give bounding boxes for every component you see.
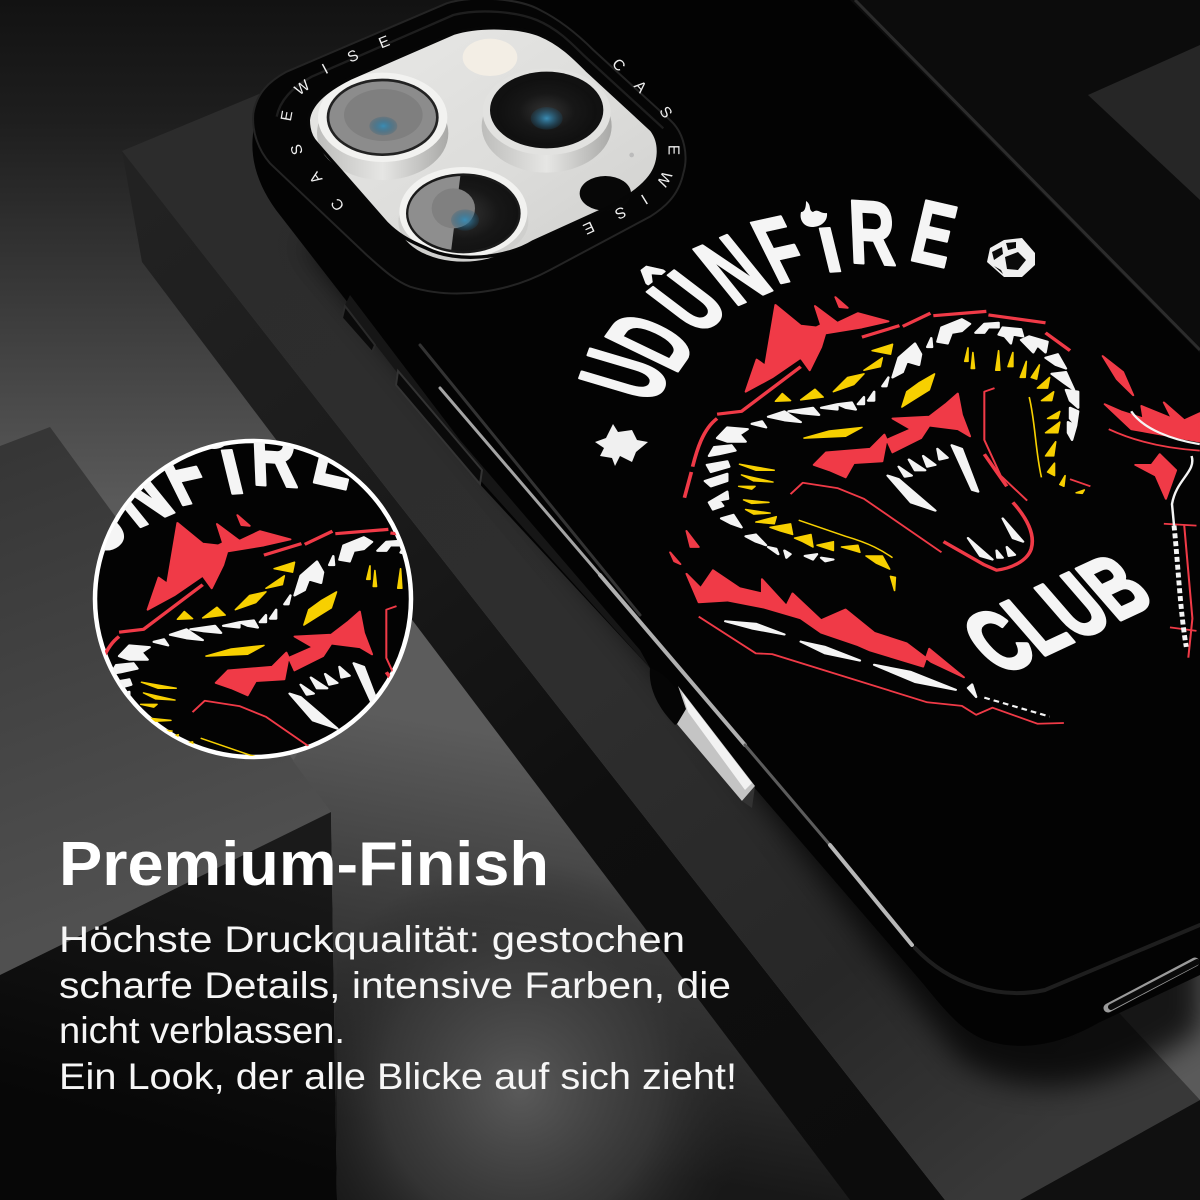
artwork title: E bbox=[903, 181, 965, 286]
bezel branding: E bbox=[376, 33, 392, 52]
lower side case tint bbox=[345, 295, 650, 668]
camera module bbox=[253, 0, 685, 293]
icon: dice bbox=[987, 238, 1035, 277]
camera plate bbox=[308, 28, 658, 257]
artwork title: U bbox=[555, 338, 694, 412]
artwork title: N bbox=[677, 217, 791, 324]
description: Höchste Druckqualität: gestochen bbox=[59, 919, 685, 960]
lens bottom bbox=[398, 167, 528, 262]
bezel branding: S bbox=[288, 142, 307, 157]
artwork title: D bbox=[582, 297, 721, 386]
silver side button bbox=[650, 668, 755, 808]
flash bbox=[463, 39, 517, 76]
bezel branding: I bbox=[638, 190, 650, 207]
bezel branding: W bbox=[653, 168, 675, 190]
bezel branding: A bbox=[306, 168, 326, 187]
background: dark area behind phone on the right bbox=[840, 0, 1200, 370]
lens right bbox=[482, 68, 612, 173]
background: light spot bbox=[337, 800, 860, 1200]
zoom title fragment: R bbox=[249, 403, 299, 507]
artwork title: Û bbox=[628, 256, 749, 349]
bezel branding: A bbox=[630, 77, 650, 97]
phone case body bbox=[252, 0, 1200, 1046]
icon: flame on the i bbox=[801, 201, 827, 227]
zoom title fragment: N bbox=[79, 439, 193, 546]
artwork dragon bbox=[670, 297, 1200, 724]
description: nicht verblassen. bbox=[59, 1010, 345, 1051]
artwork title: I bbox=[812, 215, 848, 286]
bezel branding: C bbox=[608, 56, 628, 75]
phone bbox=[252, 0, 1200, 1046]
right edge highlight bbox=[855, 0, 1200, 350]
bezel ring over plate bbox=[308, 28, 658, 257]
bezel inner gloss bbox=[277, 11, 663, 128]
microphone dot bbox=[629, 153, 634, 157]
heading: Premium-Finish bbox=[59, 830, 549, 899]
sensor bbox=[580, 176, 631, 211]
bezel branding: E bbox=[580, 218, 597, 237]
bezel branding: E bbox=[278, 109, 296, 122]
bezel branding: E bbox=[664, 145, 681, 155]
zoom title fragment: E bbox=[305, 403, 367, 508]
bezel branding bbox=[278, 33, 681, 237]
bezel branding: C bbox=[328, 195, 348, 214]
background: lower left step front bbox=[0, 812, 337, 1200]
description bbox=[59, 919, 737, 1097]
side button volume bbox=[396, 371, 482, 484]
zoom title fragment: I bbox=[214, 437, 250, 508]
zoom title fragment: F bbox=[140, 421, 225, 525]
zoom title fragment bbox=[104, 442, 349, 550]
phone shadow bbox=[300, 240, 1200, 1086]
artwork title: F bbox=[738, 199, 823, 303]
print artwork bbox=[555, 181, 1200, 724]
artwork title: R bbox=[847, 181, 897, 285]
icon: star emblem bbox=[595, 424, 648, 466]
block: dark side band bbox=[122, 151, 945, 1200]
zoom flame bbox=[210, 444, 226, 449]
camera bezel bbox=[253, 0, 685, 293]
background: lower left step top bbox=[0, 427, 331, 975]
bezel branding: S bbox=[345, 47, 361, 66]
bezel branding: W bbox=[292, 77, 314, 99]
zoom title fragment: Û bbox=[30, 478, 151, 571]
background: upper right block top bbox=[1088, 45, 1200, 200]
description: scharfe Details, intensive Farben, die bbox=[59, 965, 731, 1006]
bezel branding: S bbox=[655, 103, 675, 121]
description: Ein Look, der alle Blicke auf sich zieht! bbox=[59, 1056, 737, 1097]
background: centre gray face bbox=[293, 560, 900, 1200]
zoom circle bbox=[92, 438, 414, 760]
zoom dragon bbox=[104, 514, 410, 756]
artwork title bbox=[555, 181, 965, 412]
lens top left bbox=[317, 73, 448, 180]
bezel branding: I bbox=[319, 61, 331, 78]
side button small bbox=[342, 306, 375, 352]
block: bottom right shadow bbox=[1020, 1100, 1200, 1200]
bezel branding: S bbox=[612, 203, 628, 222]
chrome side reflection bbox=[420, 345, 1200, 993]
charging port bbox=[1108, 962, 1195, 1008]
